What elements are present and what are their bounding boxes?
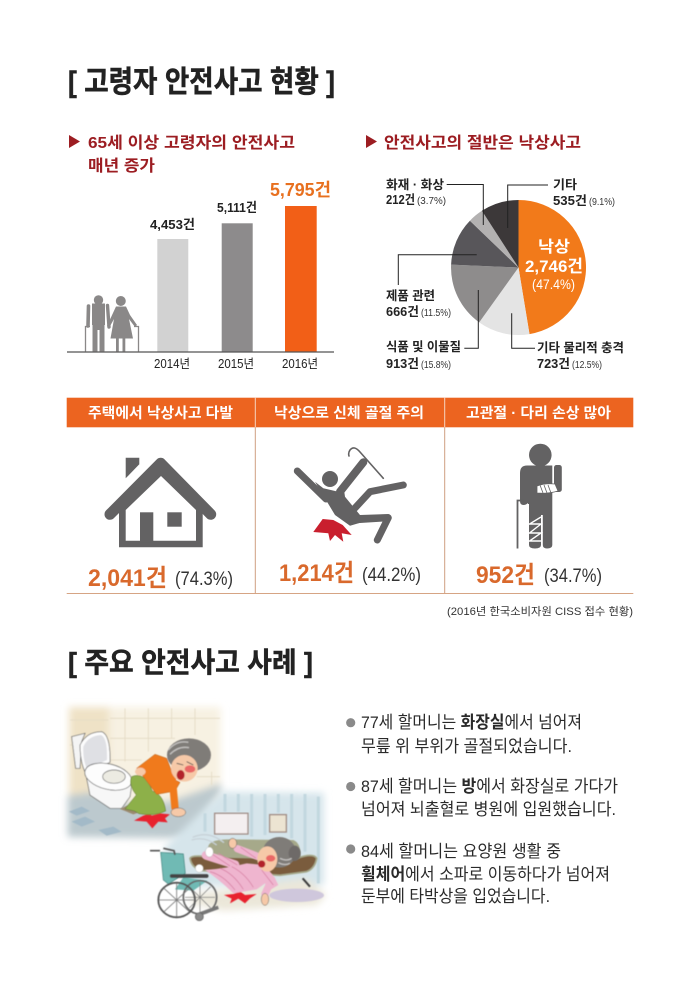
wall pictures bbox=[215, 813, 286, 834]
stat: home falls: (74.3%) bbox=[175, 569, 233, 590]
header band bbox=[67, 398, 633, 427]
bar chart: accidents by year: 2015년 bbox=[218, 357, 254, 371]
pie label: other physical impact bbox=[537, 340, 624, 371]
living room background bbox=[163, 792, 326, 911]
pie label: food: 식품 및 이물질 bbox=[386, 340, 461, 354]
pie chart: accident types: (47.4%) bbox=[532, 276, 575, 292]
pie label: products: (11.5%) bbox=[421, 308, 451, 319]
pie label: fire: 212건 bbox=[386, 193, 415, 207]
stat: fractures: (44.2%) bbox=[362, 565, 421, 586]
pie label: fire: 화재 · 화상 bbox=[386, 177, 445, 192]
case 3 text: 둔부에 타박상을 입었습니다. bbox=[361, 887, 550, 906]
stat: fractures bbox=[279, 560, 421, 587]
panel frame lines bbox=[67, 427, 633, 594]
illustration: fall from wheelchair bbox=[150, 792, 326, 921]
pie label: other physical impact: 기타 물리적 충격 bbox=[537, 340, 624, 355]
stat: hip and leg: 952건 bbox=[476, 562, 535, 589]
pie chart: accident types bbox=[398, 184, 586, 348]
bar chart: accidents by year: 4,453건 bbox=[150, 217, 195, 232]
pie label: other physical impact: 723건 bbox=[537, 357, 570, 371]
bathroom tile detail bbox=[69, 708, 220, 836]
header band: 낙상으로 신체 골절 주의 bbox=[274, 405, 424, 422]
title: major accident cases: [ 주요 안전사고 사례 ] bbox=[68, 647, 313, 678]
pie label: other: (9.1%) bbox=[589, 197, 615, 208]
bar chart: accidents by year: 5,795건 bbox=[270, 180, 331, 200]
fallen woman on sofa bbox=[195, 837, 301, 905]
icon: elderly couple bbox=[86, 295, 138, 352]
case 1 text: 무릎 위 부위가 골절되었습니다. bbox=[361, 737, 572, 756]
header band: 고관절 · 다리 손상 많아 bbox=[466, 405, 612, 422]
case 2 text bbox=[346, 777, 618, 819]
bar chart: accidents by year: 5,111건 bbox=[217, 200, 257, 215]
sofa bbox=[190, 835, 324, 902]
bar chart: accidents by year bbox=[67, 180, 334, 371]
bathroom background bbox=[68, 707, 221, 838]
case 1 text: 77세 할머니는 화장실에서 넘어져 bbox=[361, 713, 582, 732]
pie label: fire: (3.7%) bbox=[417, 196, 446, 207]
bar chart: accidents by year: 2014년 bbox=[154, 357, 190, 371]
title: elderly safety accident status: [ 고령자 안전사고 현황 ] bbox=[68, 66, 335, 99]
stat: hip and leg: (34.7%) bbox=[544, 566, 602, 587]
case 2 text: 87세 할머니는 방에서 화장실로 가다가 bbox=[361, 777, 618, 796]
icon: injured person with cast bbox=[518, 444, 562, 548]
heading: yearly increase bbox=[69, 134, 295, 175]
case 3 text: 휠체어에서 소파로 이동하다가 넘어져 bbox=[361, 865, 610, 884]
pie chart: accident types: 낙상 bbox=[538, 238, 570, 256]
pie label: food bbox=[386, 340, 461, 371]
case 3 text: 84세 할머니는 요양원 생활 중 bbox=[361, 842, 561, 861]
pie label: other: 기타 bbox=[553, 177, 578, 192]
illustration: fall in bathroom bbox=[68, 707, 221, 838]
source note: (2016년 한국소비자원 CISS 접수 현황) bbox=[447, 605, 633, 618]
icon: house bbox=[110, 458, 211, 547]
pie label: other: 535건 bbox=[553, 194, 587, 208]
case 3 text bbox=[346, 842, 610, 906]
heading: yearly increase: 65세 이상 고령자의 안전사고 bbox=[88, 134, 295, 152]
stat: home falls bbox=[88, 565, 233, 592]
pie label: products: 제품 관련 bbox=[386, 288, 435, 303]
fallen woman bbox=[120, 738, 211, 828]
stat: hip and leg bbox=[476, 562, 602, 589]
pie label: food: 913건 bbox=[386, 357, 419, 371]
pie chart: accident types: 2,746건 bbox=[525, 257, 583, 276]
icon: falling person with cane bbox=[297, 448, 403, 542]
pie label: other physical impact: (12.5%) bbox=[572, 360, 602, 371]
pie label: fire bbox=[386, 177, 446, 207]
case 2 text: 넘어져 뇌출혈로 병원에 입원했습니다. bbox=[361, 800, 616, 819]
stat: home falls: 2,041건 bbox=[88, 565, 167, 592]
heading: yearly increase: 매년 증가 bbox=[88, 157, 155, 175]
pie label: products: 666건 bbox=[386, 305, 419, 319]
bar chart: accidents by year: 2016년 bbox=[282, 357, 318, 371]
header band: 주택에서 낙상사고 다발 bbox=[88, 405, 233, 422]
pie label: other bbox=[553, 177, 615, 208]
wall stripes bbox=[205, 794, 318, 883]
wheelchair bbox=[150, 848, 218, 921]
pie label: food: (15.8%) bbox=[421, 360, 451, 371]
pie label: products bbox=[386, 288, 451, 319]
stat: fractures: 1,214건 bbox=[279, 560, 354, 587]
toilet bbox=[72, 732, 135, 808]
heading: half are falls: 안전사고의 절반은 낙상사고 bbox=[384, 134, 581, 152]
case 1 text bbox=[346, 713, 582, 756]
panel: three statistics bbox=[67, 398, 633, 594]
